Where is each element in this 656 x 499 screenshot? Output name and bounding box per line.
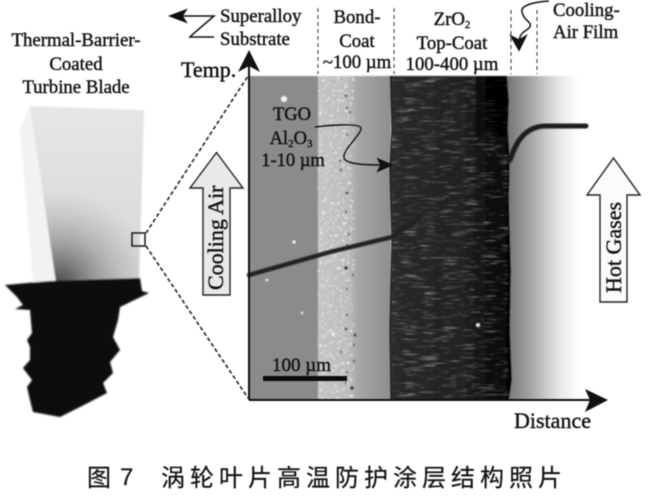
distance axis label: Distance: [514, 408, 591, 433]
arrow: cooling air: [190, 152, 243, 295]
blade airfoil: [20, 106, 144, 282]
TGO label with arrow: O: [294, 129, 307, 149]
temperature axis label: Temp.: [181, 57, 236, 82]
bright spots: [266, 96, 480, 336]
superalloy label with arrow: [170, 6, 302, 50]
micrograph panel: [249, 76, 585, 400]
TGO label with arrow: 1-10 µm: [261, 151, 325, 171]
caption: 图: [87, 458, 111, 493]
superalloy label with arrow: Superalloy: [220, 6, 302, 27]
caption: 7: [120, 464, 133, 491]
top coat label: [406, 9, 499, 75]
turbine blade illustration: [5, 106, 149, 417]
TGO label with arrow: Al: [270, 129, 288, 149]
scale bar: 100 µm: [272, 355, 331, 376]
layer: bond coat: [318, 76, 391, 400]
arrow: to substrate: [170, 10, 214, 37]
TGO label with arrow: 2: [288, 138, 294, 150]
temperature profile curve: [249, 126, 586, 275]
zoom dashed lines: [146, 76, 248, 398]
TGO interface line: [390, 76, 392, 400]
blade title: Thermal-Barrier-: [12, 30, 140, 51]
blade title: Turbine Blade: [22, 77, 130, 98]
arrow: to film: [511, 1, 549, 50]
cooling-air film label with arrow: Air Film: [553, 22, 619, 43]
layer: superalloy substrate: [249, 76, 319, 400]
hot gases label: Hot Gases: [601, 202, 626, 293]
bond coat label: [323, 7, 392, 73]
distance axis: [249, 389, 608, 412]
layer boundary dashes: [318, 8, 537, 74]
top coat label: ZrO: [434, 9, 465, 30]
scale bar: [263, 355, 347, 381]
cooling-air film label with arrow: Cooling-: [553, 0, 620, 21]
top coat label: 100-400 µm: [406, 54, 499, 75]
layer: cooling-air film: [507, 76, 585, 400]
top coat label: Top-Coat: [417, 33, 488, 54]
TGO label with arrow: TGO: [273, 105, 311, 125]
arrow: hot gases: [587, 158, 640, 302]
arrow: to TGO: [315, 125, 392, 171]
TGO label with arrow: 3: [307, 138, 313, 150]
blade title: [12, 30, 140, 98]
layer: ZrO2 top coat: [390, 76, 512, 400]
superalloy label with arrow: Substrate: [220, 29, 290, 50]
blade root: [5, 278, 149, 417]
top coat label: 2: [465, 19, 470, 31]
temperature axis: [238, 50, 260, 400]
TGO label with arrow: [261, 105, 392, 171]
bond coat label: Coat: [339, 31, 376, 52]
blade title: Coated: [49, 54, 103, 75]
layer: porous dark oxide spots: [339, 95, 356, 390]
bond coat label: ~100 µm: [323, 52, 392, 73]
cooling-air film label with arrow: [511, 0, 620, 50]
cooling air label: Cooling Air: [203, 185, 228, 290]
zoom marker square: [132, 233, 145, 246]
bond coat label: Bond-: [334, 7, 380, 28]
caption: 涡轮叶片高温防护涂层结构照片: [161, 458, 567, 493]
